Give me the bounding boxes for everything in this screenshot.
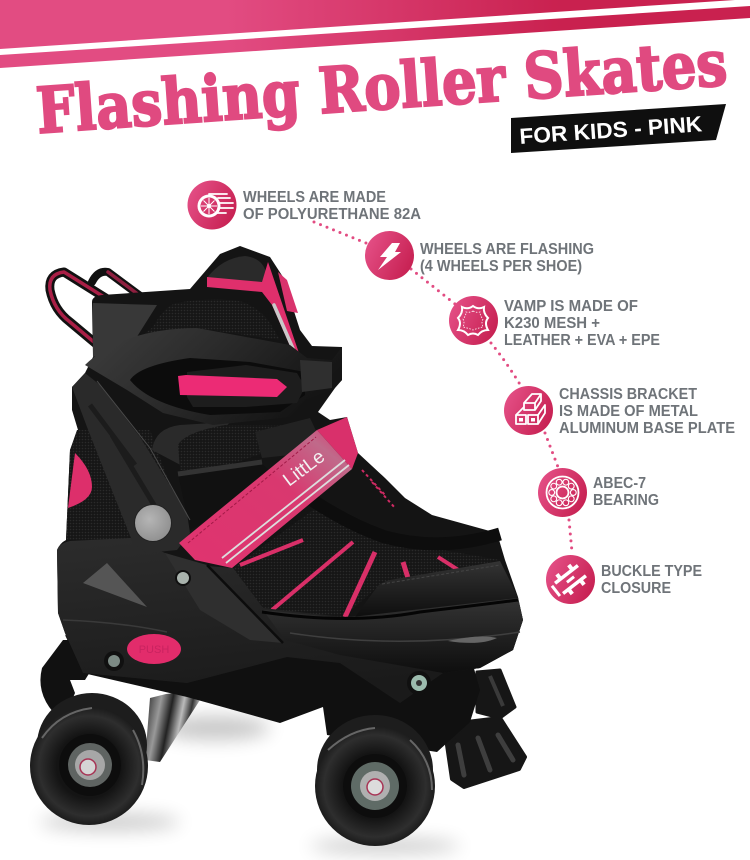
label: BEARING <box>593 492 659 509</box>
label: WHEELS ARE MADE <box>243 189 386 206</box>
boot silhouette <box>57 246 523 703</box>
upper cuff <box>93 299 280 357</box>
label: WHEELS ARE FLASHING <box>420 241 594 258</box>
icon: metal blocks <box>504 386 553 435</box>
feature: buckle closure <box>546 555 702 604</box>
tongue <box>207 256 302 362</box>
feature: wheels material <box>188 180 421 230</box>
feature: flashing wheels <box>365 231 594 280</box>
dotted connectors <box>314 222 572 552</box>
roller skate illustration <box>30 246 525 853</box>
label: OF POLYURETHANE 82A <box>243 206 421 223</box>
label: LEATHER + EVA + EPE <box>504 332 660 349</box>
chassis <box>65 635 480 752</box>
label: CLOSURE <box>601 580 671 597</box>
label: ALUMINUM BASE PLATE <box>559 420 735 437</box>
boot shell <box>57 538 523 703</box>
rear truck hanger <box>40 640 90 712</box>
push button: PUSH <box>139 644 169 656</box>
screws <box>104 570 431 695</box>
checkered side panel <box>165 553 283 643</box>
floor shadow <box>40 716 460 853</box>
toe mesh with pink lines <box>233 470 500 618</box>
rear toe stop <box>477 670 515 718</box>
feature: vamp material <box>449 296 660 349</box>
label: BUCKLE TYPE <box>601 563 702 580</box>
ankle buckle <box>85 328 342 425</box>
label: ABEC-7 <box>593 475 646 492</box>
label: VAMP IS MADE OF <box>504 298 638 315</box>
rivet <box>134 504 172 542</box>
left front wheel <box>30 693 148 825</box>
label: K230 MESH + <box>504 315 600 332</box>
label: CHASSIS BRACKET <box>559 386 697 403</box>
velcro strap <box>179 417 358 568</box>
label: (4 WHEELS PER SHOE) <box>420 258 582 275</box>
rear wheel <box>145 692 200 762</box>
brand text: LittLe <box>279 446 329 491</box>
subtitle badge: FOR KIDS - PINK <box>519 111 703 149</box>
side arm <box>72 373 190 553</box>
icon: wheel <box>188 180 236 230</box>
heel mesh vent <box>83 563 147 607</box>
icon: lightning bolt <box>365 231 414 280</box>
header stripes <box>0 0 750 68</box>
toe bumper <box>263 598 523 673</box>
toe cap <box>355 561 518 617</box>
label: IS MADE OF METAL <box>559 403 698 420</box>
push button <box>127 634 181 664</box>
feature: bearing <box>538 468 659 517</box>
icon: leather hide <box>449 296 498 345</box>
subtitle badge <box>511 104 726 153</box>
right front wheel <box>315 715 435 846</box>
icon: buckle <box>546 555 595 604</box>
toe stop <box>447 718 525 787</box>
icon: bearing <box>538 468 587 517</box>
ankle body with mesh <box>66 418 318 540</box>
feature: chassis bracket <box>504 386 735 437</box>
pull straps <box>50 272 143 358</box>
